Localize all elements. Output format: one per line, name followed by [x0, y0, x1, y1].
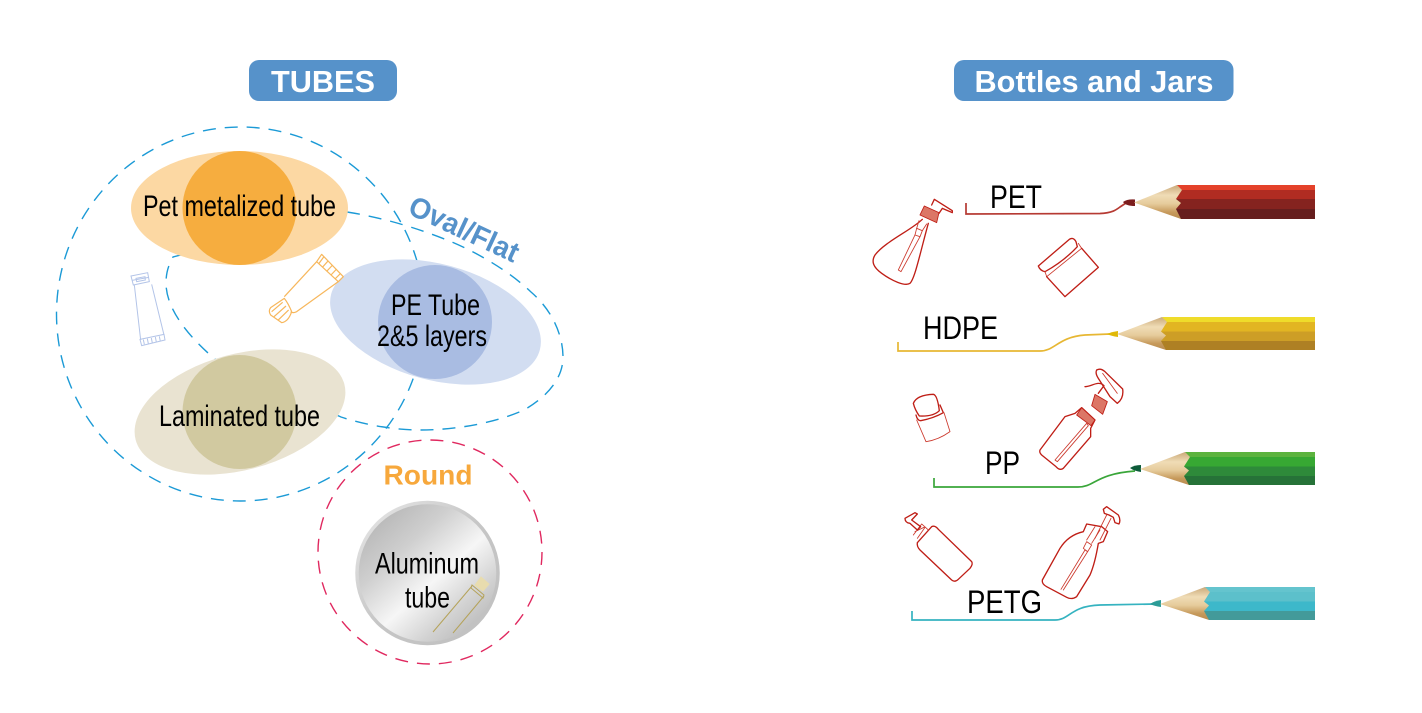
icon: small jar: [913, 394, 950, 442]
icon: pump bottle large: [1042, 507, 1120, 599]
icon: orange tube: [269, 254, 343, 323]
venn: PE tube: PE Tube: [391, 289, 480, 322]
icon: blue tube: [131, 273, 165, 346]
icon: gold tube: [433, 577, 489, 633]
pencil: PETG teal: [912, 587, 1315, 620]
aluminum tube badge: tube: [405, 582, 450, 614]
heading: TUBES: [249, 60, 397, 101]
venn: PE tube: 2&5 layers: [377, 320, 487, 353]
panel: tubes: [56, 60, 563, 664]
pencil: PP green: [934, 452, 1315, 487]
aluminum tube badge: Aluminum: [375, 548, 479, 580]
label: HDPE: HDPE: [923, 310, 998, 346]
pencil: PET red: [966, 185, 1315, 219]
label: PETG: PETG: [967, 584, 1042, 620]
dashed circle: round group: [318, 440, 542, 664]
venn: PE tube: [316, 238, 555, 406]
icon: lotion bottle: [905, 513, 972, 581]
icon: jar: [1038, 238, 1098, 297]
label: Round: Round: [384, 460, 472, 490]
heading: TUBES: TUBES: [271, 65, 375, 99]
pencil: HDPE yellow: [898, 317, 1315, 351]
panel: bottles and jars: [873, 60, 1315, 620]
dashed circle: all tubes group: [56, 127, 424, 501]
heading: Bottles and Jars: Bottles and Jars: [974, 65, 1214, 99]
icon: pump bottle: [873, 199, 952, 284]
venn: laminated tube: Laminated tube: [159, 400, 320, 433]
label: PET: PET: [990, 179, 1042, 215]
icon: spray bottle: [1040, 369, 1123, 469]
label: Oval/Flat: Oval/Flat: [404, 190, 524, 269]
label: PP: PP: [985, 445, 1020, 481]
venn: pet metalized tube: Pet metalized tube: [143, 190, 336, 223]
aluminum tube badge: [357, 502, 498, 644]
dashed outline: oval/flat group: [166, 212, 563, 430]
venn: laminated tube: [121, 328, 359, 496]
venn: pet metalized tube: [131, 151, 348, 265]
